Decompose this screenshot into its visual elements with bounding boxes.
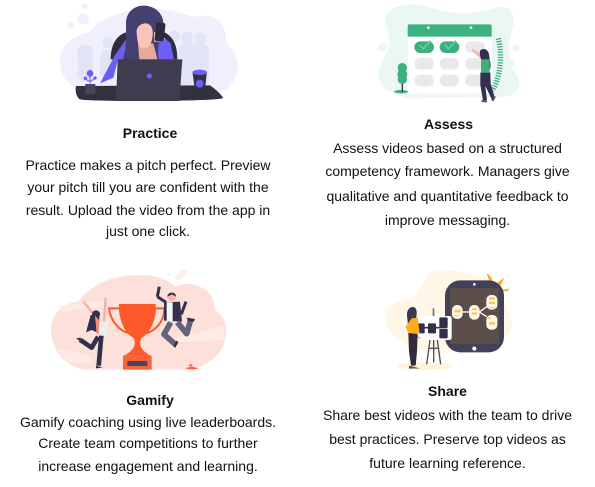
icon: trophy with jumping people: [51, 270, 226, 370]
heading: gamify: Gamify: [126, 392, 174, 408]
heading: assess: Assess: [424, 116, 473, 132]
heading: practice: Practice: [123, 125, 177, 141]
panel: gamify: [20, 270, 276, 474]
text: gamify description: [20, 414, 276, 474]
panel: assess: [325, 4, 570, 228]
text: assess description: improve messaging.: [385, 212, 510, 228]
icon: tablet with flowchart and woman: [385, 270, 512, 370]
text: assess description: competency framework. Managers give: [325, 163, 570, 179]
text: share description: future learning reference.: [369, 455, 526, 471]
text: practice description: your pitch till you are confident with the: [27, 179, 269, 195]
text: practice description: result. Upload the video from the app in: [26, 202, 270, 218]
icon: calendar with woman: [378, 4, 520, 102]
panel: practice: [25, 4, 271, 239]
text: practice description: [25, 157, 271, 239]
heading: share: Share: [428, 383, 467, 399]
text: share description: [323, 407, 572, 471]
text: practice description: just one click.: [106, 223, 190, 239]
panel: share: [323, 270, 572, 471]
text: practice description: Practice makes a pitch perfect. Preview: [25, 157, 271, 173]
text: gamify description: increase engagement and learning.: [38, 458, 258, 474]
text: assess description: [325, 140, 570, 228]
icon: woman at laptop on phone: [60, 4, 238, 101]
text: share description: best practices. Preserve top videos as: [329, 431, 566, 447]
text: assess description: qualitative and quantitative feedback to: [326, 188, 569, 204]
text: gamify description: Gamify coaching using live leaderboards.: [20, 414, 276, 430]
text: share description: Share best videos with the team to drive: [323, 407, 572, 423]
text: gamify description: Create team competitions to further: [38, 435, 258, 451]
text: assess description: Assess videos based on a structured: [333, 140, 562, 156]
